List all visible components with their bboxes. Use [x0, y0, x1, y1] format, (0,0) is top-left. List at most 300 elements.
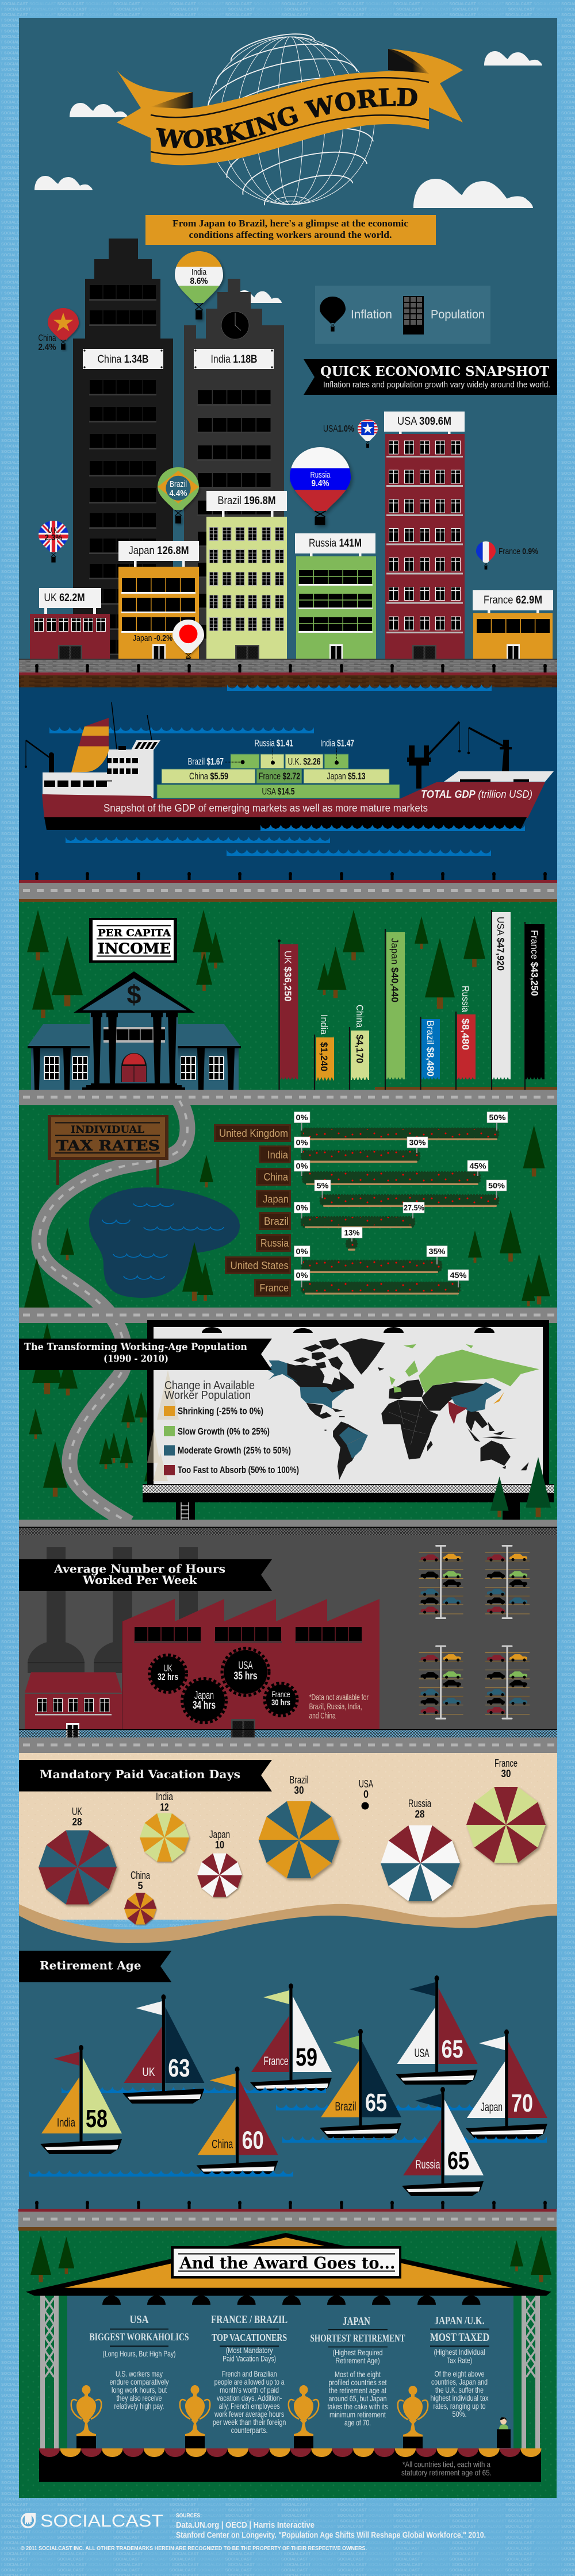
tax country signs: Russia	[260, 1237, 289, 1249]
ship masts and cranes	[25, 702, 504, 768]
ship funnel	[71, 718, 109, 772]
building: Russia	[295, 533, 376, 659]
map legend: Shrinking (-25% to 0%)	[178, 1406, 263, 1417]
income banner: Russia: Russia	[460, 986, 471, 1012]
gear: Japan hours	[182, 1678, 227, 1723]
data note	[309, 1693, 369, 1721]
boat: China	[197, 2067, 278, 2176]
umbrella: France	[466, 1787, 546, 1863]
sign: per capita income: INCOME	[98, 940, 171, 957]
award column: France / Brazil: per week than their foreign	[213, 2417, 286, 2427]
income banner: UK	[280, 944, 298, 1079]
boat: Brazil: 65	[365, 2089, 387, 2117]
award column: Japan: JAPAN	[343, 2315, 370, 2328]
road	[18, 2209, 557, 2231]
tax hedges	[301, 1128, 499, 1294]
title text: WORKING WORLD	[156, 87, 417, 148]
map legend: Change in Available	[164, 1379, 255, 1392]
bank building: $	[126, 980, 141, 1009]
award column: France / Brazil: French and Brazilian	[222, 2369, 277, 2378]
tax rate flags: 0%	[296, 1247, 308, 1256]
vacation labels: 28	[72, 1816, 82, 1828]
heading: transforming working-age population: (1990 - 2010)	[103, 1353, 168, 1364]
gear: UK hours: 32 hrs	[158, 1671, 178, 1682]
tax country signs: United Kingdom	[219, 1128, 288, 1139]
building: USA	[384, 412, 465, 659]
balloon: France	[476, 541, 538, 570]
bank windows	[44, 1056, 224, 1080]
tax rate flags: 45%	[469, 1161, 486, 1170]
balloon: Japan	[133, 620, 204, 664]
trees beside billboard	[29, 1323, 158, 1497]
award column: USA: U.S. workers may	[116, 2369, 163, 2378]
heading: quick economic snapshot: Inflation rates and population growth vary widely around the world.	[323, 380, 550, 390]
sources: Stanford Center on Longevity. "Population Age Shifts Will Reshape Global Workforce." 2010.	[176, 2530, 486, 2540]
balloon: USA: USA1.0%	[323, 424, 354, 434]
sign: China population: China 1.34B	[98, 353, 148, 366]
gear: USA hours	[222, 1648, 269, 1695]
ship hull	[42, 782, 545, 818]
factory chimneys	[28, 1547, 198, 1673]
heading: vacation days	[19, 1760, 272, 1791]
waves in front of hull	[66, 825, 525, 856]
balloon: UK: U.K.	[48, 525, 59, 535]
gear: Japan hours: 34 hrs	[193, 1700, 216, 1712]
boat: India	[40, 2045, 122, 2154]
fence	[19, 1729, 557, 1737]
award column: Japan / U.K.: highest individual tax	[430, 2393, 489, 2402]
award column: Japan: Most of the eight	[335, 2370, 381, 2379]
boat: Russia: Russia	[415, 2158, 440, 2171]
sign: Brazil population	[206, 491, 287, 511]
award column: Japan / U.K.: rates, ranging up to	[434, 2401, 486, 2410]
boat: Russia	[402, 2087, 484, 2196]
stage lamps	[102, 2296, 481, 2305]
tax rate flags: 30%	[409, 1138, 426, 1147]
award column: Japan / U.K.: countries, Japan and	[431, 2377, 488, 2386]
map legend: Slow Growth (0% to 25%)	[178, 1426, 270, 1437]
balloon: India: India	[191, 267, 207, 277]
award column: USA: they also receive	[116, 2393, 162, 2402]
GDP labels with leader lines: Brazil $1.67	[187, 756, 224, 767]
award column: USA: USA	[130, 2313, 149, 2326]
cargo ship: Snapshot of the GDP of emerging markets as well as more mature markets	[103, 802, 428, 814]
balloon: India	[175, 251, 223, 320]
income banner: USA: USA $47,920	[495, 917, 506, 971]
waves	[282, 2136, 547, 2143]
heading: and the award goes to: And the Award Goes to...	[179, 2254, 396, 2273]
intro text box: From Japan to Brazil, here's a glimpse at the economic	[172, 218, 408, 229]
cargo ship	[25, 702, 554, 830]
panel: retirement age sea	[19, 1916, 557, 2209]
world map	[268, 1338, 539, 1480]
bank door	[121, 1053, 147, 1082]
award column: France / Brazil: FRANCE / BRAZIL	[211, 2313, 288, 2326]
gear: UK hours	[150, 1655, 186, 1692]
income banner: France: France $43,250	[529, 930, 540, 996]
gear: France hours	[264, 1683, 297, 1716]
income banner: Japan: Japan $40,440	[389, 938, 400, 1002]
boat: UK: UK	[142, 2066, 155, 2079]
boat: UK	[122, 1994, 204, 2104]
sign: USA population	[384, 412, 465, 432]
sign: individual tax rates	[48, 1115, 168, 1185]
boat: Japan: 70	[511, 2089, 533, 2117]
award column: USA: endure comparatively	[109, 2377, 169, 2386]
boat: USA	[396, 1975, 478, 2085]
award column: USA: BIGGEST WORKAHOLICS	[90, 2331, 189, 2343]
award column: USA: relatively high pay.	[114, 2401, 164, 2410]
sign: Russia population	[295, 533, 375, 553]
globe	[190, 18, 389, 214]
award column: Japan: SHORTEST RETIREMENT	[310, 2332, 405, 2344]
income banner: India: $1,240	[319, 1042, 329, 1071]
sign: per capita income	[89, 918, 177, 963]
retirement footnote	[401, 2460, 492, 2477]
tax rate flags: 35%	[429, 1247, 446, 1256]
wet sand	[19, 1904, 557, 1954]
balloon: Russia	[290, 447, 351, 525]
sources: SOURCES:	[176, 2513, 202, 2519]
panel: individual tax rates	[19, 1101, 557, 1523]
umbrellas	[39, 1787, 546, 1924]
cargo containers	[157, 754, 400, 798]
award column: Japan / U.K.: (Highest Individual	[434, 2347, 485, 2356]
GDP labels with leader lines	[187, 738, 354, 767]
boat: France: France	[263, 2055, 289, 2068]
lake	[89, 1187, 240, 1298]
award column: Japan / U.K.: MOST TAXED	[430, 2331, 489, 2344]
vacation labels: Japan	[209, 1829, 230, 1840]
umbrella: Japan	[197, 1854, 242, 1897]
road	[19, 1090, 557, 1105]
award column: France / Brazil: people are allowed up to a	[214, 2377, 285, 2386]
award column: Japan: Retirement Age)	[336, 2356, 379, 2365]
gear: France hours: France	[271, 1690, 290, 1700]
heading: average hours: Average Number of Hours	[53, 1562, 225, 1575]
stage roof	[26, 2233, 551, 2296]
income banner: Brazil: Brazil $8,480	[425, 1020, 436, 1076]
sign: India population	[194, 349, 274, 369]
balloon: UK	[39, 521, 68, 563]
award column: Japan / U.K.: Of the eight above	[435, 2369, 485, 2378]
GDP labels with leader lines: Russia $1.41	[255, 738, 293, 748]
road	[19, 1520, 557, 1535]
sign: per capita income: PER CAPITA	[98, 928, 171, 939]
tax rate flags: 50%	[488, 1181, 505, 1190]
trees	[24, 1125, 550, 1317]
map legend: Moderate Growth (25% to 50%)	[178, 1445, 291, 1456]
ghost trees on billboard	[147, 1370, 179, 1481]
gear: France hours: 30 hrs	[271, 1698, 290, 1708]
waves	[276, 2104, 540, 2110]
building: UK	[30, 588, 110, 659]
data note: *Data not available for	[309, 1693, 369, 1702]
award column: USA: long work hours, but	[112, 2385, 167, 2394]
retirement footnote: statutory retirement age of 65.	[401, 2468, 492, 2477]
tax country signs: United States	[230, 1260, 289, 1271]
trophies	[71, 2385, 428, 2450]
vacation labels: UK	[72, 1806, 82, 1817]
panel: awards stage	[19, 2231, 557, 2498]
boat: Russia: 65	[447, 2147, 469, 2175]
cargo ship: USA $14.5	[262, 786, 294, 797]
balloon: China	[38, 308, 79, 352]
tax country signs: China	[263, 1171, 289, 1183]
billboard with world map	[143, 1320, 554, 1522]
stage front with bunting	[39, 2448, 542, 2482]
harbor dock	[19, 659, 557, 687]
boat: UK: 63	[168, 2054, 190, 2082]
boat: Japan	[466, 2029, 547, 2139]
umbrella: Brazil	[259, 1801, 339, 1878]
building: China	[73, 239, 173, 659]
tax rate flags: 27.5%	[404, 1203, 424, 1212]
tax rate flags: 45%	[450, 1270, 467, 1279]
cargo ship: France $2.72	[259, 771, 300, 782]
panel: beach and vacation days	[19, 1753, 557, 1954]
vacation labels: Brazil	[290, 1774, 308, 1786]
sign: China population	[83, 349, 163, 369]
sources: Data.UN.org | OECD | Harris Interactive	[176, 2520, 315, 2530]
retirement footnote: *All countries tied, each with a	[402, 2460, 490, 2469]
boat: Brazil: Brazil	[335, 2100, 356, 2113]
cargo ship: China $5.59	[189, 771, 228, 782]
heading: quick economic snapshot: QUICK ECONOMIC SNAPSHOT	[320, 364, 549, 379]
winding road	[39, 1101, 187, 1523]
small office building	[25, 1621, 122, 1737]
balloon: UK: 2.3%	[45, 533, 62, 543]
award column: Japan: (Highest Required	[332, 2348, 383, 2357]
income banner: UK: UK $36,250	[282, 951, 293, 1001]
bank building	[28, 971, 241, 1090]
vacation labels	[72, 1758, 518, 1891]
tax country signs: India	[267, 1149, 289, 1161]
intro text box	[145, 215, 436, 245]
trees	[27, 910, 485, 1018]
umbrella: India	[140, 1813, 189, 1862]
income banner: China: China	[354, 1005, 365, 1028]
balloon: Brazil: 4.4%	[169, 489, 187, 498]
boat: Japan: Japan	[481, 2101, 503, 2114]
balloon: France: France 0.9%	[499, 547, 538, 556]
grass at foot of banners	[280, 1077, 544, 1082]
waves	[62, 2087, 326, 2093]
sign: India population: India 1.18B	[210, 353, 258, 366]
vacation labels: 5	[138, 1880, 143, 1891]
vacation labels: France	[494, 1758, 518, 1769]
income banner: USA	[492, 912, 511, 1079]
copyright: © 2011 SOCIALCAST INC. ALL OTHER TRADEMARKS HEREIN ARE RECOGNIZED TO BE THE PROPERTY OF THEIR RESPECTIVE OWNERS.	[21, 2545, 367, 2552]
balloon: China: China	[38, 333, 56, 343]
award column: USA	[90, 2313, 189, 2410]
vacation labels: 30	[294, 1785, 304, 1796]
vacation labels: 30	[501, 1768, 511, 1779]
footer	[21, 2512, 486, 2552]
award column: Japan: age of 70.	[344, 2418, 371, 2427]
income banner: Russia: $8,480	[460, 1018, 471, 1050]
income banner: India: India	[319, 1014, 329, 1035]
sign: Japan population	[118, 541, 199, 561]
road	[19, 880, 557, 902]
tax rate flags: 0%	[296, 1270, 308, 1279]
boat: Brazil	[320, 2029, 401, 2138]
gear: Japan hours: Japan	[194, 1690, 214, 1702]
tax country signs: France	[260, 1282, 289, 1294]
award column: France / Brazil: (Most Mandatory	[226, 2346, 273, 2355]
tax rate flags: 13%	[344, 1228, 360, 1237]
vacation labels: 12	[160, 1801, 169, 1813]
data note: Brazil, Russia, India,	[309, 1702, 362, 1712]
balloon: Russia: 9.4%	[312, 479, 329, 489]
umbrella: Russia	[381, 1825, 460, 1901]
award column: Japan: profiled countries set	[329, 2378, 387, 2387]
award column: Japan / U.K.: Tax Rate)	[447, 2355, 472, 2364]
income banner: China	[351, 1005, 369, 1080]
heading: transforming working-age population	[19, 1339, 272, 1370]
balloon: Brazil: Brazil	[170, 479, 187, 489]
sign: France population: France 62.9M	[484, 594, 542, 606]
data note: and China	[309, 1711, 336, 1721]
sign: UK population: UK 62.2M	[44, 592, 85, 604]
cargo ship: U.K. $2.26	[288, 756, 321, 767]
road	[19, 1737, 557, 1753]
heading: retirement age: Retirement Age	[40, 1959, 141, 1973]
award column: Japan	[310, 2315, 405, 2427]
award column: France / Brazil: Paid Vacation Days)	[223, 2354, 276, 2363]
Socialcast logo: SOCIALCAST	[40, 2512, 163, 2531]
vacation labels: India	[156, 1791, 174, 1802]
map legend	[164, 1379, 299, 1475]
legend: inflation and population: Population	[431, 308, 485, 321]
foreground trees	[490, 1457, 551, 1517]
building: Japan	[118, 541, 199, 659]
heading: quick economic snapshot	[304, 359, 557, 395]
balloon: Japan: Japan -0.2%	[133, 633, 172, 643]
building: India	[184, 279, 284, 659]
gear: UK hours: UK	[163, 1663, 172, 1674]
tax country signs	[214, 1124, 291, 1297]
award column: Japan: minimum retirement	[329, 2410, 386, 2419]
boat: India: 58	[86, 2105, 108, 2133]
panel: GDP sea section	[19, 685, 557, 881]
income banner: India	[316, 1014, 334, 1081]
umbrella: UK	[39, 1830, 117, 1905]
tax rate flags: 0%	[296, 1113, 308, 1122]
boat: China: 60	[242, 2127, 264, 2154]
heading: average hours	[19, 1559, 272, 1591]
map legend: Worker Population	[164, 1389, 251, 1402]
building: France	[473, 590, 553, 659]
boat: USA: USA	[415, 2047, 430, 2060]
tax country signs: Japan	[263, 1193, 289, 1205]
award column: Japan / U.K.: the U.K. suffer the	[435, 2385, 484, 2394]
award column: USA: (Long Hours, But High Pay)	[102, 2349, 176, 2358]
boat: India: India	[57, 2116, 75, 2129]
award column: Japan / U.K.: 50%.	[452, 2409, 467, 2419]
tax rate flags: 5%	[316, 1181, 329, 1190]
panel: per capita income	[19, 902, 557, 1090]
balloon: Russia: Russia	[310, 470, 331, 480]
award column: Japan / U.K.	[430, 2314, 489, 2419]
income banner: Brazil	[421, 1019, 440, 1079]
tax rate flags: 0%	[296, 1203, 308, 1212]
balloon: China: 2.4%	[38, 343, 56, 352]
boat: France	[250, 1983, 332, 2093]
parking lots	[419, 1545, 530, 1720]
legend: inflation and population	[315, 286, 490, 344]
legend: inflation and population: Inflation	[351, 308, 392, 321]
gear: USA hours: USA	[238, 1660, 253, 1672]
cargo ship: Japan $5.13	[327, 771, 366, 782]
income banner: France	[525, 924, 545, 1079]
umbrella: China	[124, 1893, 156, 1924]
clouds	[34, 51, 542, 303]
boat: France: 59	[296, 2043, 317, 2071]
sign: individual tax rates: INDIVIDUAL	[71, 1124, 144, 1136]
sign: Russia population: Russia 141M	[309, 537, 362, 549]
road	[19, 1308, 557, 1323]
balloon: India: 8.6%	[190, 276, 208, 286]
sign: Brazil population: Brazil 196.8M	[217, 495, 276, 507]
award column: France / Brazil: ally, French employees	[219, 2401, 280, 2410]
tax country signs: Brazil	[264, 1216, 289, 1227]
tax rate flags: 50%	[489, 1113, 506, 1122]
heading: vacation days: Mandatory Paid Vacation Days	[40, 1767, 240, 1781]
panel: sky and city section	[19, 18, 557, 659]
vacation labels: 10	[215, 1839, 224, 1851]
vacation labels: 28	[415, 1808, 424, 1820]
speaker at podium	[497, 2417, 511, 2448]
award column: France / Brazil: TOP VACATIONERS	[212, 2332, 287, 2343]
tax rate flags: 0%	[296, 1138, 308, 1147]
sign: Japan population: Japan 126.8M	[129, 545, 189, 557]
building: Brazil	[206, 491, 287, 659]
tax rate flags: 0%	[296, 1161, 308, 1170]
heading: retirement age	[19, 1951, 171, 1982]
vacation labels: 0	[363, 1789, 369, 1800]
map legend: Too Fast to Absorb (50% to 100%)	[178, 1464, 299, 1475]
award column: France / Brazil: counterparts.	[231, 2425, 268, 2435]
flag poles	[279, 910, 525, 1090]
award column: France / Brazil: work fewer average hours	[214, 2409, 284, 2419]
panel: average hours worked per week	[19, 1535, 557, 1737]
stage backdrop and pillars	[40, 2296, 540, 2448]
factory building	[122, 1599, 379, 1737]
award column: Japan: around 65, but Japan	[329, 2394, 386, 2403]
balloon: Brazil	[158, 467, 199, 524]
award column: Japan: the retirement age at	[329, 2386, 386, 2395]
vacation labels: China	[131, 1870, 151, 1881]
boat: China: China	[212, 2138, 233, 2151]
award column: France / Brazil: month's worth of paid	[220, 2385, 279, 2394]
title banner	[117, 49, 463, 166]
balloon: USA	[323, 420, 378, 448]
waves	[29, 2170, 293, 2177]
sign: USA population: USA 309.6M	[397, 416, 451, 428]
income banner: China: $4,170	[354, 1035, 365, 1063]
waves	[49, 685, 492, 733]
sign: individual tax rates: TAX RATES	[56, 1137, 160, 1154]
cargo ship: TOTAL GDP (trillion USD)	[421, 789, 532, 800]
sources	[176, 2513, 486, 2540]
award column: France / Brazil	[211, 2313, 288, 2435]
intro text box: conditions affecting workers around the world.	[189, 229, 392, 240]
award column: France / Brazil: vacation days. Addition-	[217, 2393, 282, 2402]
vacation labels: Russia	[408, 1798, 432, 1809]
income banner: Japan	[386, 932, 405, 1079]
trees	[30, 2236, 551, 2282]
